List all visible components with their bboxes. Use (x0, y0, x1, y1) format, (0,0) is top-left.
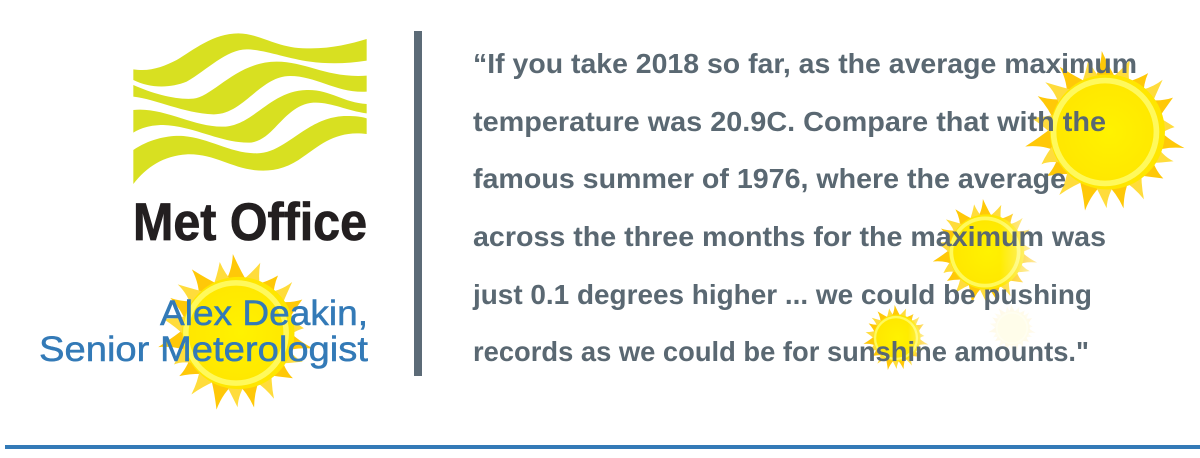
attribution: Senior Meterologist (39, 330, 368, 369)
logo wordmark: Met Office (133, 193, 367, 252)
icon: wave bands (133, 33, 367, 184)
Met Office logo (133, 33, 367, 252)
quote text: records as we could be for sunshine amounts." (473, 336, 1089, 367)
quote text: temperature was 20.9C. Compare that with the (473, 106, 1106, 137)
quote text: famous summer of 1976, where the average (473, 163, 1066, 194)
sun middle (931, 199, 1046, 305)
attribution (39, 294, 368, 369)
attribution: Alex Deakin, (160, 294, 368, 333)
sun behind name (156, 254, 316, 413)
vertical divider (414, 31, 422, 376)
quote text: “If you take 2018 so far, as the average maximum (473, 48, 1137, 79)
quote text: just 0.1 degrees higher ... we could be pushing (472, 279, 1092, 310)
quote text: across the three months for the maximum was (473, 221, 1106, 252)
sun faint (988, 304, 1036, 352)
sun top right (1023, 51, 1187, 214)
bottom rule (5, 445, 1200, 449)
sun small (863, 305, 936, 371)
quote text (472, 48, 1137, 367)
